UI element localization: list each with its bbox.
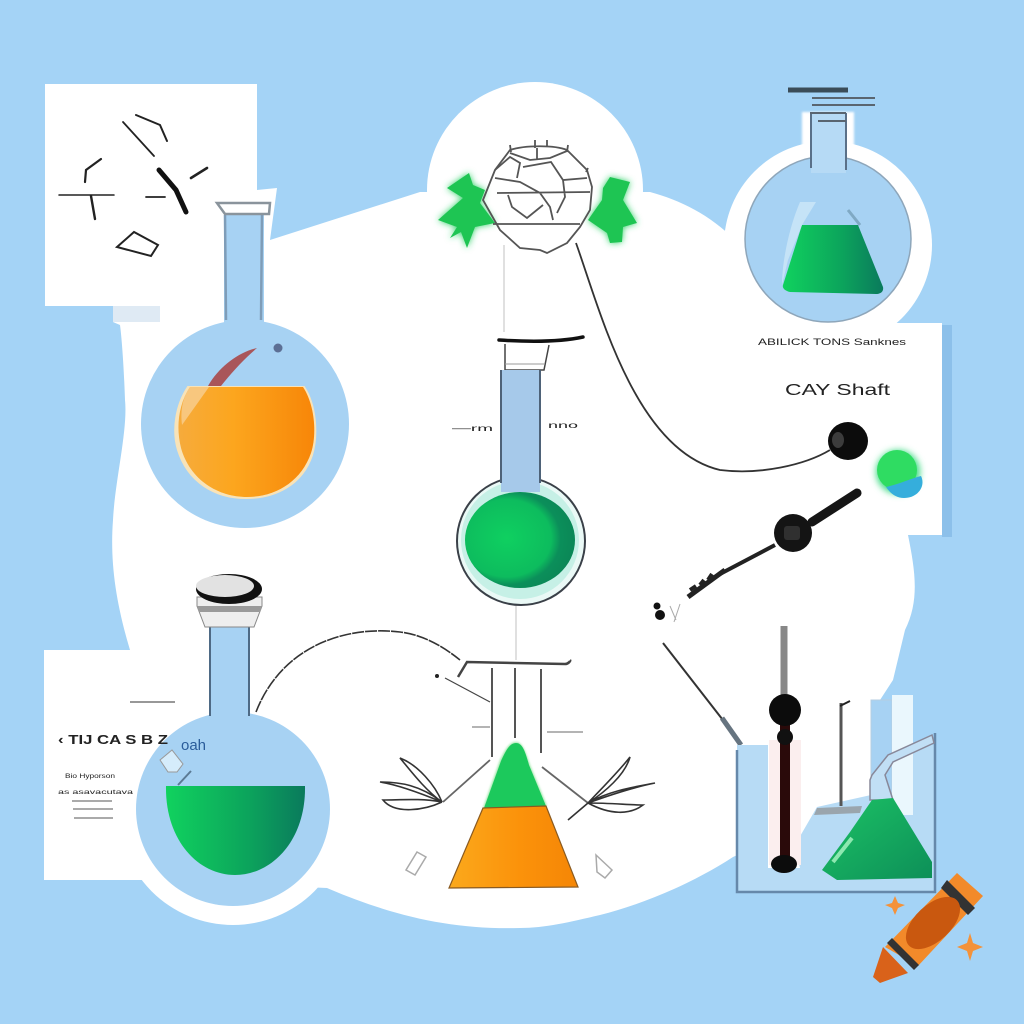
flask: center green flask: nno (548, 421, 579, 430)
flask: top-right flask (724, 90, 932, 349)
flask: center green flask: —rm (452, 424, 494, 433)
curve and black knob (576, 243, 868, 471)
probe arm (654, 493, 857, 745)
panel: right text block (750, 323, 952, 537)
icon: green and blue dot (876, 450, 922, 498)
graphic: brain network with green leaves (438, 140, 637, 253)
flask: center green flask (452, 245, 585, 660)
flask: orange round flask (141, 203, 349, 528)
flask halo: lower-left (118, 695, 348, 925)
panel: lower-left note: ‹ TIJ CA S B Z (58, 732, 168, 747)
flask: conical orange and green (380, 660, 655, 888)
graphic: lower-right apparatus box (737, 626, 935, 892)
curve: dashed connector (256, 631, 460, 712)
flask: lower-left green flask (136, 574, 330, 906)
logo: crayon with sparkles (873, 873, 983, 983)
panel: right text block: ABILICK TONS Sanknes (758, 337, 907, 347)
panel: lower-left note: Bio Hyporson (65, 774, 115, 780)
panel: top-left note (45, 84, 257, 306)
panel: lower-left note: oah (181, 737, 206, 754)
panel: right text block: CAY Shaft (785, 382, 891, 399)
panel: lower-left note (58, 702, 206, 818)
white central blob (44, 82, 942, 928)
panel: lower-left note: as asavacutava (58, 790, 134, 796)
